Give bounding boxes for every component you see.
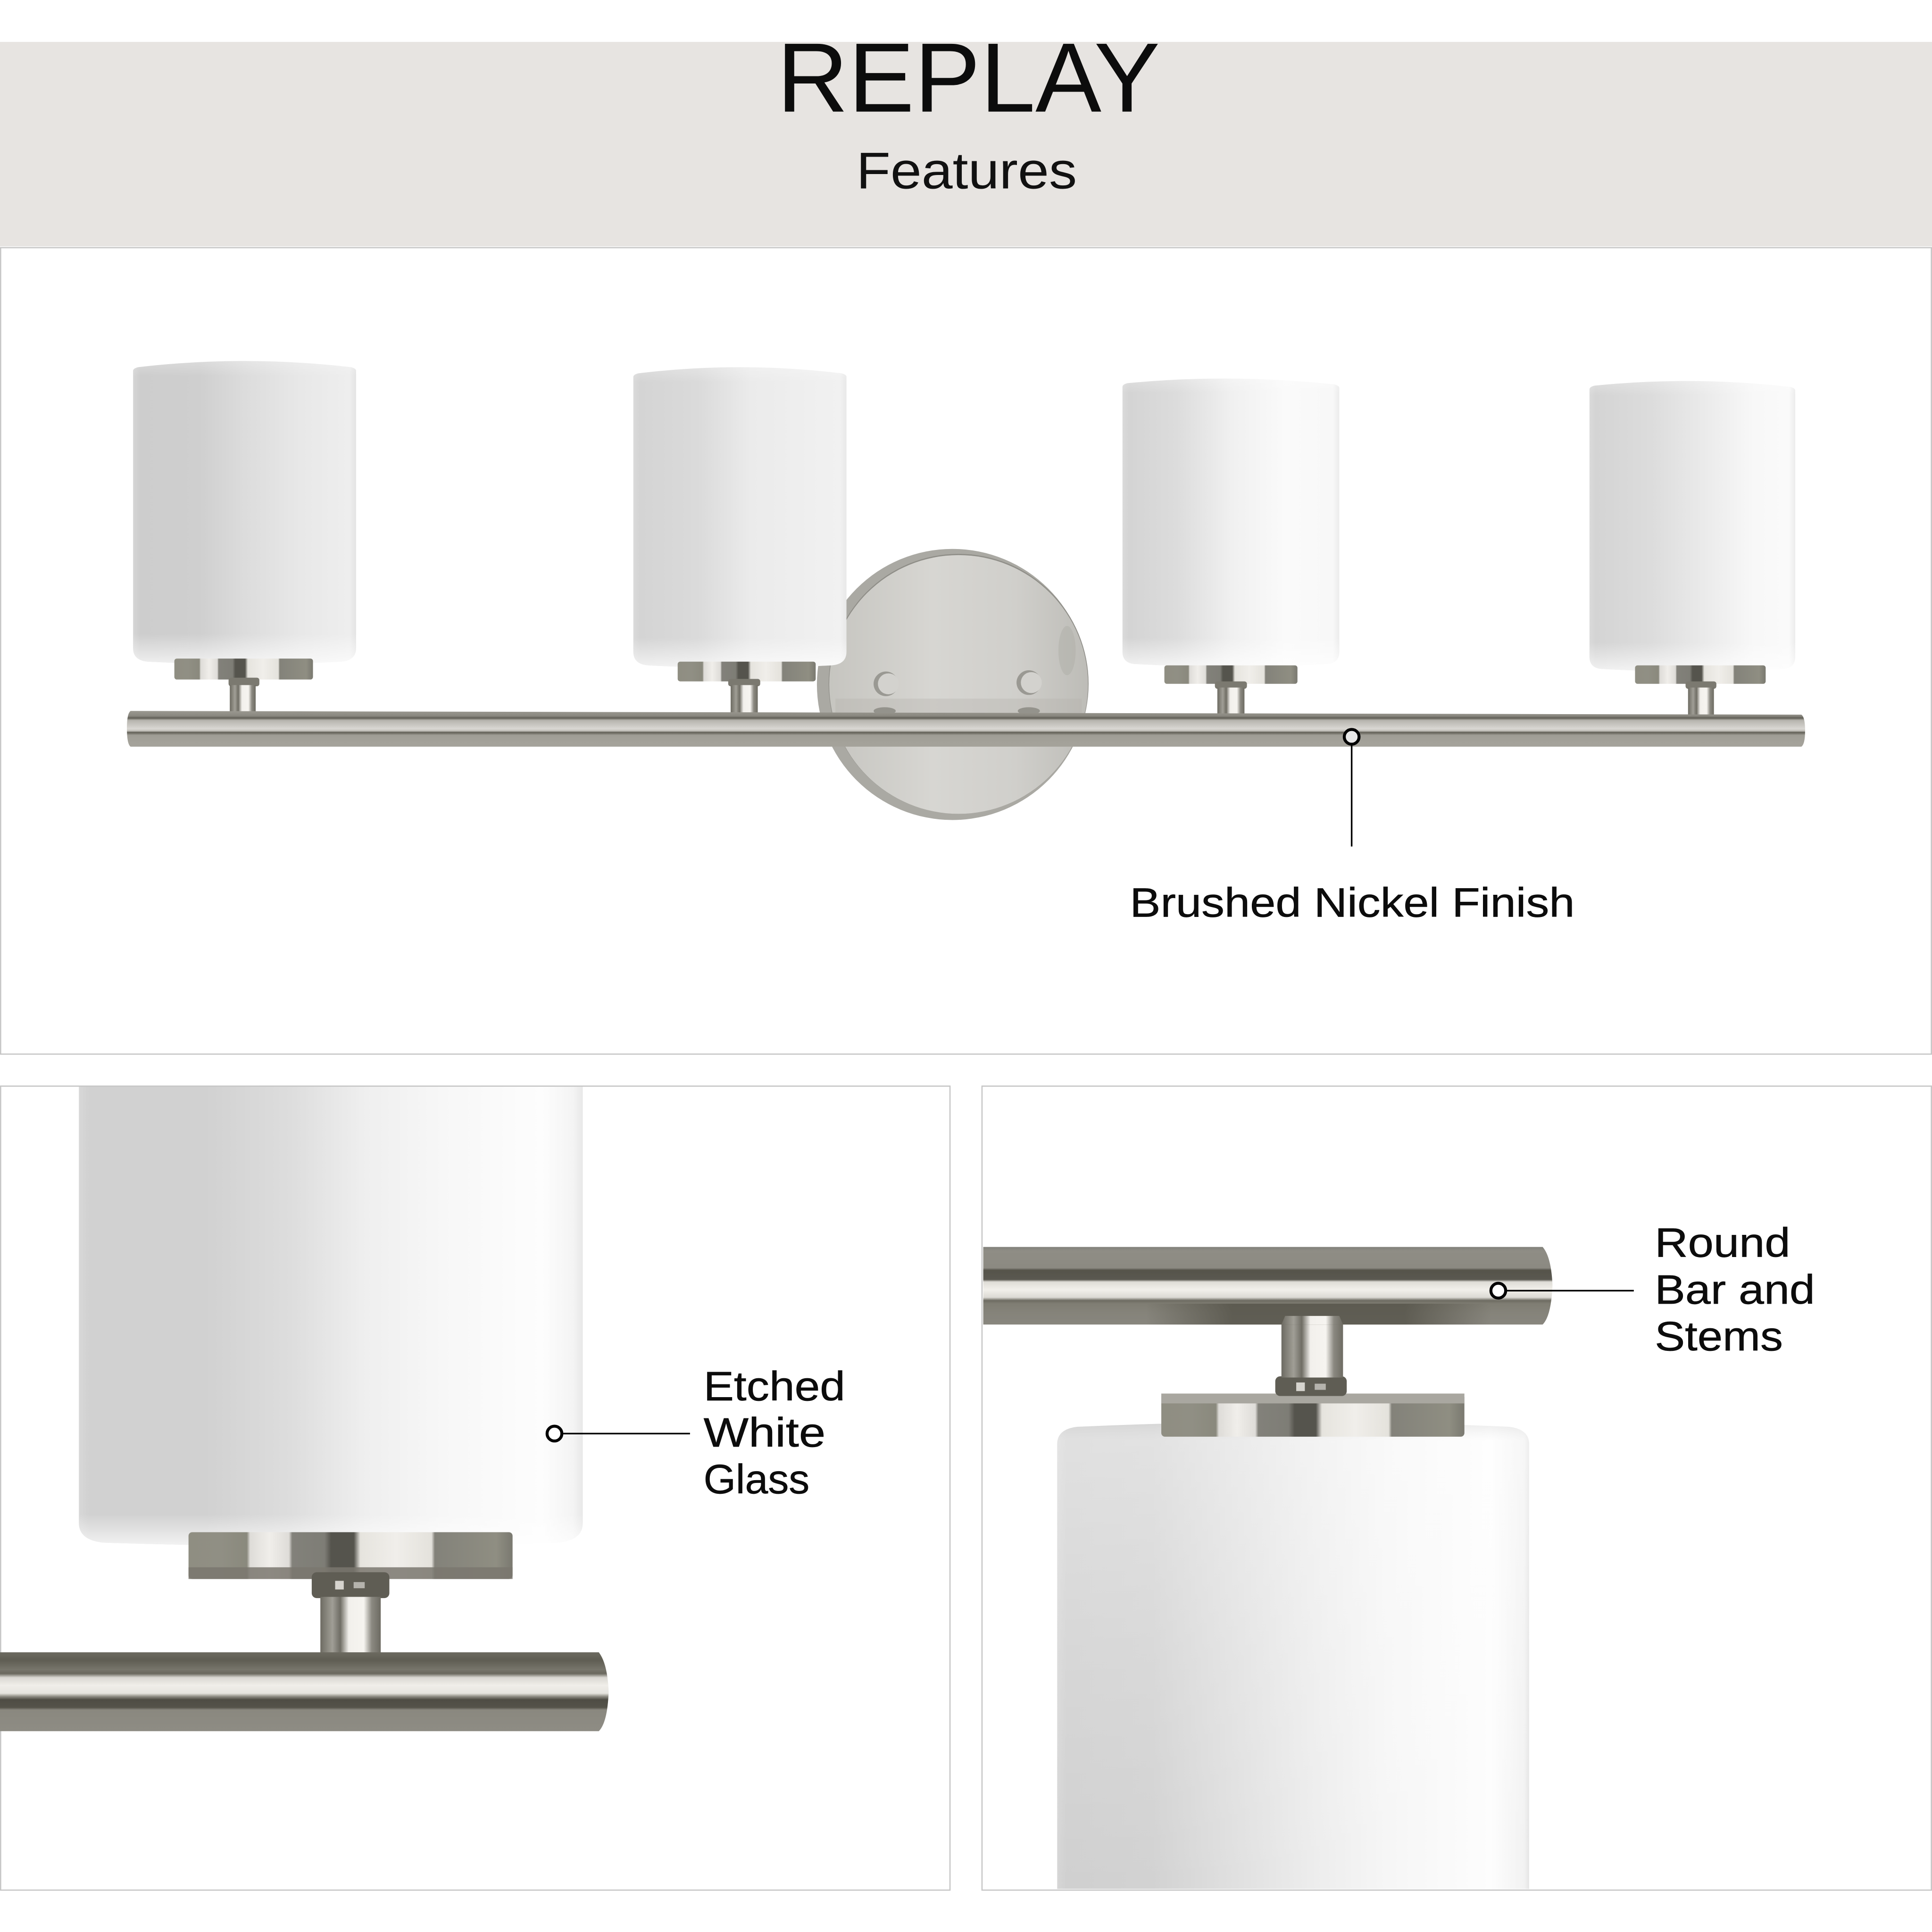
horizontal bar xyxy=(127,711,1805,747)
backplate xyxy=(817,549,1089,820)
title: REPLAY xyxy=(777,23,1160,133)
callout: round bar and stems: Bar and xyxy=(1655,1266,1815,1313)
shade 4 xyxy=(1590,381,1795,717)
round bar xyxy=(0,1652,608,1731)
shade 1 xyxy=(133,361,356,715)
metal cap xyxy=(1161,1324,1465,1437)
callout: etched white glass: Etched xyxy=(704,1363,845,1409)
shade 2 xyxy=(633,367,847,717)
metal cap 1 xyxy=(175,658,313,715)
panel: full fixture xyxy=(0,248,1932,1054)
callout: etched white glass: Glass xyxy=(704,1456,809,1502)
callout: etched white glass xyxy=(547,1363,845,1502)
callout: brushed nickel finish: Brushed Nickel Finish xyxy=(1130,880,1574,926)
round bar xyxy=(983,1247,1552,1324)
header band xyxy=(0,23,1932,246)
glass shade xyxy=(1057,1422,1529,1889)
callout: etched white glass: White xyxy=(704,1409,825,1456)
metal cap xyxy=(189,1532,513,1658)
callout: brushed nickel finish xyxy=(1130,729,1574,926)
callout: round bar and stems xyxy=(1491,1219,1815,1359)
shade 3 xyxy=(1123,379,1340,717)
panel: bar and stem detail xyxy=(982,1086,1932,1890)
metal cap 3 xyxy=(1165,666,1298,717)
metal cap 2 xyxy=(678,662,816,717)
etched glass shade xyxy=(79,1087,583,1546)
callout: round bar and stems: Round xyxy=(1655,1219,1790,1266)
callout: round bar and stems: Stems xyxy=(1655,1313,1783,1359)
metal cap 4 xyxy=(1635,666,1765,717)
subtitle: Features xyxy=(857,142,1077,200)
panel: glass detail xyxy=(0,1086,950,1890)
